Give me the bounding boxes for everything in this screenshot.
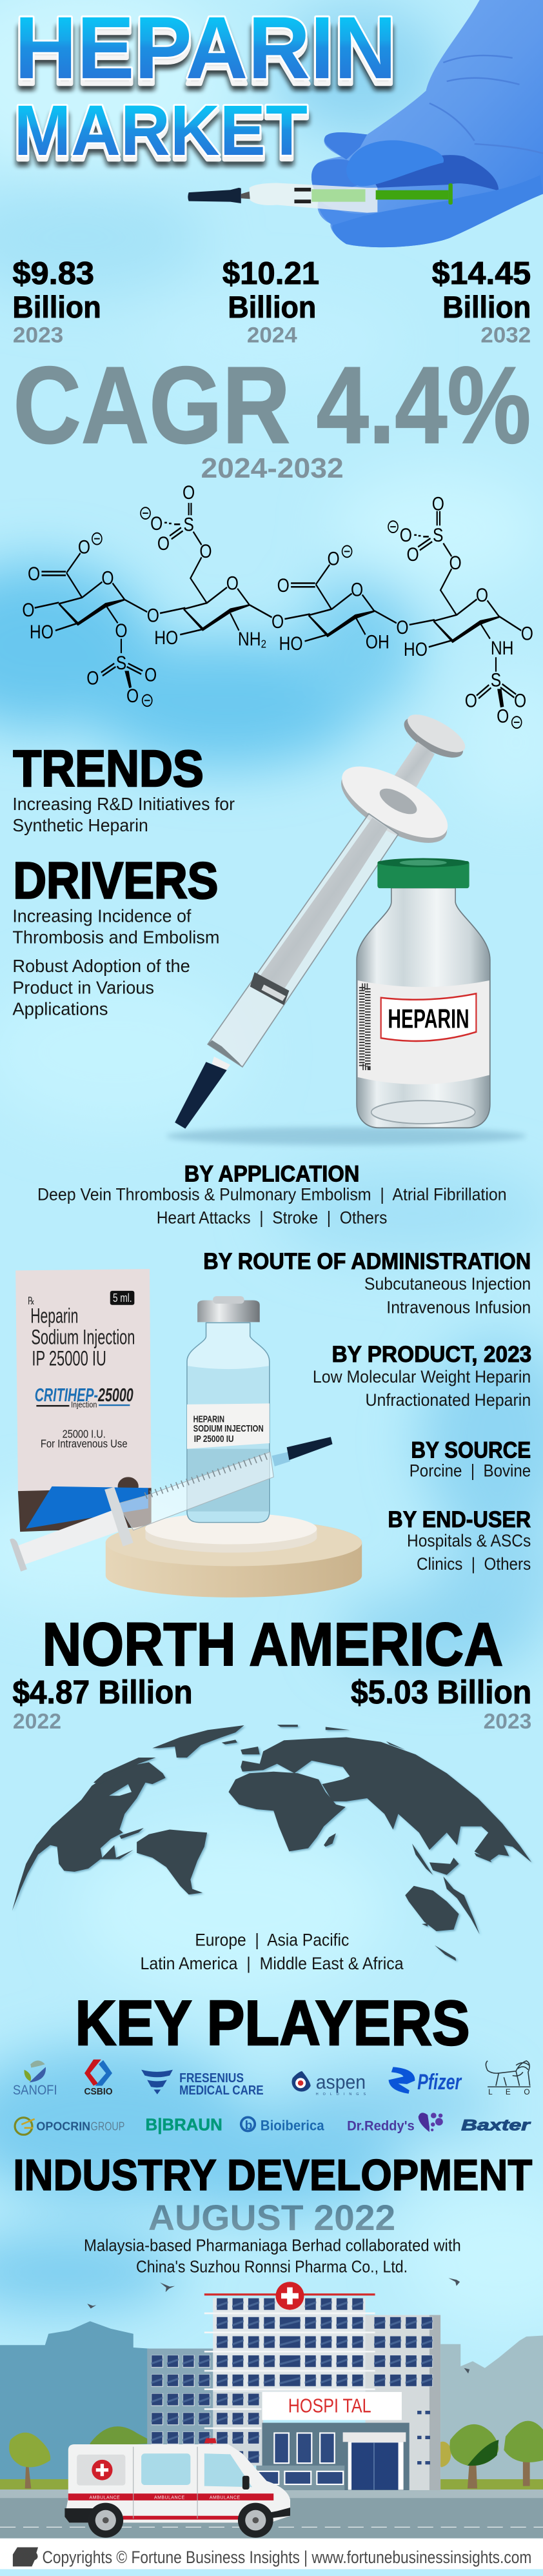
value: 2023: 2023 — [484, 1710, 531, 1733]
bottom section — [0, 2060, 543, 2569]
chemical structure of heparin: O — [199, 540, 212, 562]
chemical structure of heparin: O — [183, 482, 195, 503]
chemical structure of heparin: O — [328, 547, 340, 569]
ground and road — [0, 2479, 543, 2539]
industry development text: China's Suzhou Ronnsi Pharma Co., Ltd. — [136, 2258, 408, 2276]
drivers — [12, 851, 219, 1019]
segment: by product — [313, 1341, 531, 1410]
chemical structure of heparin: O — [396, 616, 409, 638]
chemical structure of heparin: O — [400, 524, 412, 546]
logo: Bioiberica: Bioiberica — [261, 2118, 324, 2133]
chemical structure of heparin: O — [147, 604, 159, 626]
logo: Fresenius Medical Care: MEDICAL CARE — [179, 2084, 264, 2098]
chemical structure of heparin: O — [157, 532, 170, 554]
logo: Bioiberica: b — [245, 2119, 252, 2133]
logo: Dr. Reddy's: Dr.Reddy's — [347, 2118, 415, 2133]
stat: 2023 value: $9.83 — [12, 256, 94, 291]
chemical structure of heparin: O — [78, 536, 90, 558]
icon: medicine box: For Intravenous Use — [41, 1437, 128, 1450]
stat: 2032 value: Billion — [442, 290, 531, 324]
drivers: Robust Adoption of the — [12, 957, 190, 977]
icon: large syringe — [175, 707, 469, 1129]
drivers: Thrombosis and Embolism — [12, 928, 219, 948]
value: 2022 — [12, 1674, 193, 1733]
icon: medicine box: 5 ml. — [113, 1292, 132, 1305]
logo: Opocrin Group: OPOCRIN — [36, 2120, 90, 2133]
chemical structure of heparin: O — [22, 599, 35, 621]
chemical structure of heparin: S — [183, 513, 194, 535]
title: HEPARIN — [15, 8, 397, 107]
chemical structure of heparin: O — [521, 622, 533, 644]
chemical structure of heparin: O — [351, 578, 363, 600]
segments section — [10, 1161, 531, 1597]
icon: medicine box: CRITIHEP-25000 — [35, 1384, 133, 1406]
city skyline — [0, 2321, 543, 2481]
stat: 2023 value: 2023 — [13, 323, 63, 347]
logo: Pfizer — [389, 2067, 462, 2094]
floor shadow — [166, 1127, 526, 1145]
logo: Pfizer: Pfizer — [417, 2070, 462, 2094]
vial label text: HEPARIN — [193, 1414, 224, 1425]
chemical structure of heparin: HO — [30, 621, 54, 642]
chemical structure of heparin: O — [449, 552, 462, 573]
ambulance lettering: AMBULANCE — [154, 2495, 185, 2500]
chemical structure of heparin: HO — [404, 638, 428, 660]
stat: 2024 value: 2024 — [247, 323, 297, 347]
drivers: Applications — [12, 1000, 108, 1019]
icon: medicine box: Heparin — [30, 1304, 78, 1328]
drivers: Increasing Incidence of — [12, 907, 192, 926]
logo: Baxter: Baxter — [461, 2117, 531, 2134]
logo: Fresenius Medical Care — [141, 2070, 264, 2098]
chemical structure of heparin: O — [277, 574, 290, 596]
logo: Fresenius Medical Care: FRESENIUS — [179, 2071, 244, 2085]
trends — [12, 739, 235, 836]
value: 2022: $4.87 Billion — [12, 1674, 193, 1710]
chemical structure of heparin — [22, 482, 533, 728]
stat: 2023 value: Billion — [12, 290, 101, 324]
world map — [12, 1725, 531, 1961]
title: MARKET — [14, 95, 308, 175]
other regions list: Europe | Asia Pacific — [195, 1931, 349, 1950]
chemical structure of heparin: S — [116, 652, 126, 673]
industry development text — [84, 2237, 461, 2276]
chemical structure of heparin: O — [406, 543, 419, 565]
hospital sign: HOSPI TAL — [288, 2395, 371, 2417]
logo: B Braun: B|BRAUN — [146, 2116, 222, 2134]
value: 2022: 2022 — [13, 1710, 61, 1733]
stat: 2024 value: $10.21 — [222, 256, 319, 291]
footer bar — [0, 2539, 543, 2569]
logo: LEO — [486, 2061, 531, 2096]
trends: Increasing R&D Initiatives for — [12, 795, 235, 814]
other regions list — [140, 1931, 404, 1974]
chemical structure of heparin: O — [497, 705, 509, 727]
segment: by route of administration — [203, 1248, 531, 1317]
icon: medicine box: Sodium Injection — [31, 1326, 135, 1349]
ambulance lettering: AMBULANCE — [90, 2495, 120, 2500]
regional section — [12, 1610, 531, 2059]
icon: heparin vial — [357, 858, 490, 1128]
vial label text — [193, 1414, 264, 1445]
drivers: Product in Various — [12, 979, 154, 998]
industry development text: Malaysia-based Pharmaniaga Berhad collaborated with — [84, 2237, 461, 2255]
logo: Aspen: HOLDINGS — [316, 2093, 366, 2096]
stat: 2024 value: Billion — [228, 290, 316, 324]
logo: Dr. Reddy's — [347, 2113, 443, 2133]
chemical structure of heparin: O — [465, 689, 477, 711]
chemical structure of heparin: O — [86, 667, 99, 689]
title: HEPARIN — [15, 4, 397, 103]
chemical structure of heparin: O — [28, 563, 40, 585]
icon: gloved hand holding syringe — [188, 0, 543, 247]
stat: 2023 value — [12, 256, 101, 347]
chemical structure of heparin: S — [491, 669, 501, 691]
segment: by application: Heart Attacks | Stroke | Others — [157, 1208, 387, 1228]
chemical structure of heparin: HO — [279, 633, 303, 654]
stat: 2032 value: $14.45 — [432, 256, 531, 291]
chemical structure of heparin: NH — [491, 637, 513, 658]
logo: Sanofi — [13, 2060, 57, 2098]
ambulance lettering: AMBULANCE — [210, 2495, 241, 2500]
segment: by application — [37, 1161, 507, 1228]
segment: by application: BY APPLICATION — [184, 1161, 359, 1186]
chemical structure of heparin: NH — [238, 628, 261, 649]
ambulance wheels — [88, 2503, 273, 2538]
icon: lying syringe — [10, 1437, 333, 1572]
chemical structure of heparin: O — [126, 685, 139, 706]
icon: small syringe — [188, 183, 453, 213]
chemical structure of heparin: O — [432, 493, 444, 514]
icon: medicine box: ℞ — [28, 1295, 35, 1307]
logo: Opocrin Group: GROUP — [91, 2120, 124, 2133]
chemical structure of heparin: O — [150, 512, 163, 534]
stat: 2024 value — [222, 256, 319, 347]
chemical structure of heparin: O — [226, 573, 239, 594]
vial label text: IP 25000 IU — [194, 1434, 233, 1445]
logo: CSBio — [84, 2060, 113, 2097]
title: MARKET — [14, 99, 308, 179]
logo: LEO: L E O — [488, 2088, 530, 2096]
chemical structure of heparin: O — [144, 664, 157, 685]
trends: TRENDS — [13, 739, 204, 797]
segment: by end-user — [388, 1506, 531, 1574]
hospital sign — [262, 2392, 402, 2420]
title: HEPARIN — [15, 0, 397, 97]
icon: Fortune Business Insights logo — [13, 2548, 38, 2566]
value: 2023 — [351, 1674, 531, 1733]
header section — [12, 0, 543, 484]
icon: glass vial — [187, 1296, 270, 1523]
trends and drivers section — [12, 482, 533, 1145]
chemical structure of heparin: O — [101, 567, 114, 589]
chemical structure of heparin: HO — [154, 627, 178, 648]
date heading: AUGUST 2022 — [148, 2198, 395, 2238]
title — [14, 0, 397, 179]
logo: Aspen — [291, 2071, 366, 2096]
icon: medicine box — [15, 1269, 152, 1532]
title: MARKET — [14, 90, 308, 170]
logo: Aspen: aspen — [316, 2071, 366, 2093]
chemical structure of heparin: OH — [366, 631, 390, 653]
icon: birds — [87, 2278, 469, 2373]
vial label: HEPARIN — [388, 1004, 469, 1034]
chemical structure of heparin: S — [433, 524, 444, 546]
stat: 2032 value — [432, 256, 531, 347]
title: HEPARIN — [15, 0, 397, 97]
icon: medicine box: Injection — [71, 1400, 97, 1410]
trees behind — [9, 2421, 543, 2488]
chemical structure of heparin: O — [272, 611, 284, 633]
chemical structure of heparin: O — [115, 620, 128, 642]
other regions list: Latin America | Middle East & Africa — [140, 1954, 404, 1974]
icon: medicine box: 25000 I.U. — [63, 1428, 106, 1441]
red cross emblem — [275, 2282, 304, 2310]
stat: 2032 value: 2032 — [480, 323, 531, 347]
ambulance lettering — [90, 2495, 241, 2500]
icon: medicine box: IP 25000 IU — [32, 1347, 106, 1370]
drivers: DRIVERS — [13, 851, 218, 909]
trends: Synthetic Heparin — [12, 816, 148, 836]
icon: hospital building — [147, 2282, 440, 2490]
chemical structure of heparin: 2 — [261, 638, 266, 651]
logo: Opocrin Group — [15, 2118, 124, 2135]
logo: Sanofi: SANOFI — [13, 2082, 57, 2098]
chemical structure of heparin: O — [514, 689, 526, 711]
chemical structure of heparin: O — [476, 584, 488, 606]
pedestal — [106, 1513, 362, 1597]
icon: ambulance — [64, 2438, 290, 2538]
vial label text: SODIUM INJECTION — [193, 1424, 264, 1434]
logos: key players — [13, 2060, 531, 2135]
title: MARKET — [14, 90, 308, 170]
vial label — [381, 993, 476, 1041]
CAGR headline: 2024-2032 — [201, 452, 344, 484]
segment: by source — [410, 1437, 531, 1481]
logo: CSBio: CSBIO — [84, 2086, 113, 2097]
